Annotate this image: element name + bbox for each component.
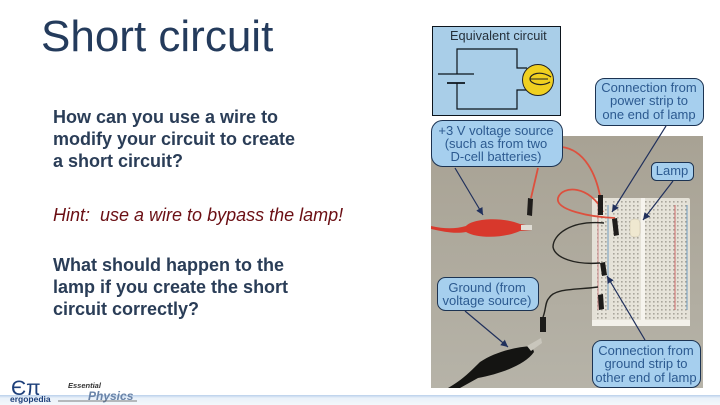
callout: lamp: Lamp <box>656 163 688 178</box>
callout: power strip connection: power strip to <box>610 93 688 108</box>
logo: ergopedia <box>10 377 51 404</box>
equivalent circuit label: Equivalent circuit <box>450 28 547 43</box>
bottom band <box>0 395 720 405</box>
callout: voltage source: D-cell batteries) <box>450 149 542 164</box>
breadboard <box>592 198 690 326</box>
follow-up question text: What should happen to the <box>53 255 284 275</box>
callout: voltage source <box>432 120 562 166</box>
logo: essential physics: Essential <box>68 381 102 390</box>
arrow: ground to black clip <box>465 311 508 347</box>
callout: power strip connection: Connection from <box>601 80 697 95</box>
panel: photo background <box>431 136 703 388</box>
black wire connectors <box>540 262 607 332</box>
callout: ground strip connection: Connection from <box>598 343 694 358</box>
circuit wires <box>438 49 527 109</box>
follow-up question text: circuit correctly? <box>53 299 199 319</box>
callout: ground strip connection: ground strip to <box>604 356 688 371</box>
red wire <box>531 147 615 218</box>
callout: power strip connection: one end of lamp <box>602 107 696 122</box>
red wire connectors <box>527 195 619 236</box>
red alligator clip <box>431 219 532 237</box>
callout: power strip connection <box>596 78 704 126</box>
callout: ground <box>438 278 538 310</box>
title: Short circuit <box>41 12 273 61</box>
callout: ground strip connection <box>592 340 700 388</box>
panel: equivalent circuit <box>432 26 560 116</box>
callout: ground strip connection: other end of lamp <box>595 370 697 385</box>
black alligator clip <box>448 338 542 388</box>
callout: ground: Ground (from <box>448 280 526 295</box>
hint text: Hint: use a wire to bypass the lamp! <box>53 205 343 225</box>
callout: lamp <box>652 162 694 180</box>
callout: voltage source: +3 V voltage source <box>438 123 554 138</box>
logo: ergopedia: ergopedia <box>10 394 51 404</box>
logo: ergopedia: Єπ <box>11 377 41 400</box>
icon: lamp <box>522 64 554 96</box>
question text <box>53 107 295 171</box>
arrow: voltage source to red clip <box>455 168 483 215</box>
question text: How can you use a wire to <box>53 107 278 127</box>
callout: voltage source: (such as from two <box>445 136 547 151</box>
arrow: ground strip to lamp end <box>607 276 645 340</box>
black wires <box>543 223 604 317</box>
lamp <box>630 219 640 237</box>
follow-up question text: lamp if you create the short <box>53 277 288 297</box>
logo: essential physics <box>58 381 137 403</box>
callout: ground: voltage source) <box>443 293 531 308</box>
question text: a short circuit? <box>53 151 183 171</box>
follow-up question text <box>53 255 288 319</box>
arrow: lamp callout to lamp <box>643 181 673 220</box>
question text: modify your circuit to create <box>53 129 295 149</box>
logo: essential physics: Physics <box>88 389 134 403</box>
arrow: power strip to lamp end <box>612 126 666 212</box>
